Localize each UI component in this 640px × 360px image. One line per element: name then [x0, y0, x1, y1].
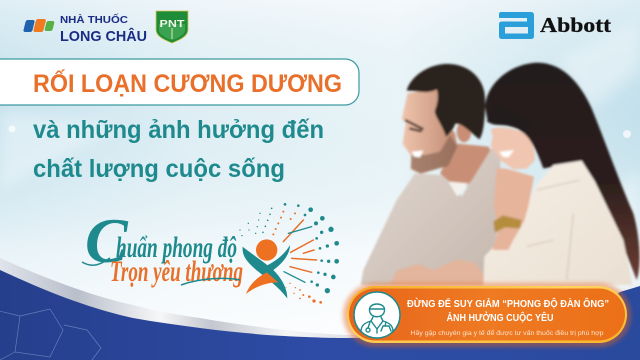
panel headline — [407, 297, 609, 324]
logo: PNT shield — [156, 11, 188, 43]
blue wave footer — [0, 258, 640, 360]
slogan: Chuẩn phong độ, Trọn yêu thương: C — [85, 205, 129, 276]
subtitle: chất lượng cuộc sống — [33, 155, 285, 183]
woman jacket — [483, 161, 633, 285]
man smile — [412, 151, 423, 157]
panel orange fill — [349, 288, 625, 340]
woman face — [491, 128, 535, 169]
man hand on table — [390, 259, 484, 285]
panel supporting text: Hãy gặp chuyên gia y tế để được tư vấn thuốc điều trị phù hợp — [410, 328, 604, 337]
jacket fold — [527, 180, 580, 280]
logo: Nhà Thuốc Long Châu — [23, 12, 147, 45]
orange rays — [283, 220, 317, 272]
man hair — [407, 64, 485, 139]
slogan: Chuẩn phong độ, Trọn yêu thương: Trọn yêu thương — [110, 255, 243, 288]
figure teal swoosh — [243, 247, 287, 298]
title pill — [0, 59, 359, 105]
call-to-action panel — [343, 283, 631, 347]
main heading: RỐI LOẠN CƯƠNG DƯƠNG — [33, 68, 342, 98]
panel headline: ẢNH HƯỞNG CUỘC YÊU — [446, 311, 554, 324]
logo mark — [23, 19, 55, 32]
panel gold border — [347, 286, 627, 343]
dot bursts — [239, 203, 339, 293]
pharmacy name: NHÀ THUỐC — [60, 12, 128, 26]
teal rays — [284, 227, 312, 282]
woman hair — [485, 63, 640, 280]
slogan emblem: figure with radiating rays — [239, 203, 339, 304]
icon: doctor — [354, 292, 400, 338]
man face — [402, 88, 457, 174]
slogan: Chuẩn phong độ, Trọn yêu thương: huẩn phong độ — [116, 231, 237, 264]
logo: Abbott — [499, 12, 611, 39]
figure orange leg — [246, 272, 278, 294]
man beard — [411, 135, 457, 173]
slogan: Chuẩn phong độ, Trọn yêu thương — [82, 205, 243, 288]
logo: Nhà Thuốc Long Châu: LONG CHÂU — [60, 27, 147, 45]
man eye — [405, 120, 423, 131]
woman hand and forearm — [493, 168, 534, 250]
figure teal arm — [257, 245, 290, 275]
man neck — [440, 143, 493, 187]
man sweater — [361, 148, 502, 285]
wristwatch — [493, 215, 522, 233]
logo: Abbott: Abbott — [540, 13, 611, 37]
woman smile — [499, 150, 514, 157]
subtitle — [33, 116, 324, 183]
woman fringe — [487, 103, 530, 135]
couple photo — [361, 63, 640, 285]
panel headline: ĐỪNG ĐỂ SUY GIẢM “PHONG ĐỘ ĐÀN ÔNG” — [407, 297, 609, 310]
logo: PNT shield: PNT — [160, 19, 184, 30]
man ear — [457, 121, 471, 142]
figure head — [256, 239, 277, 261]
man undershirt — [448, 182, 468, 197]
subtitle: và những ảnh hưởng đến — [33, 116, 324, 144]
